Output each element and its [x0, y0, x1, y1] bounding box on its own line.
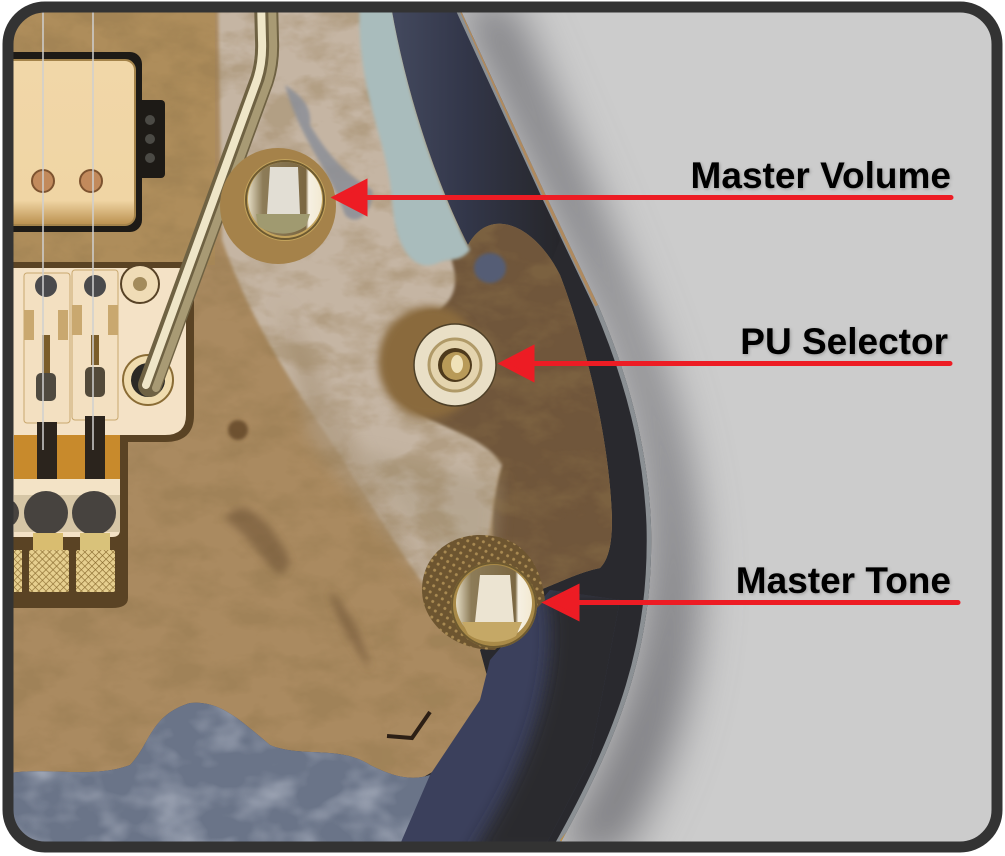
- translucent pale resin field: [218, 0, 502, 640]
- arrow: pu selector: [503, 348, 950, 378]
- tremolo arm: [146, 0, 273, 388]
- pale blue resin streak: [359, 0, 470, 265]
- strings: [43, 0, 93, 450]
- callout: pu selector: [503, 321, 950, 378]
- arrow: master tone: [547, 588, 958, 618]
- knob: master volume: [220, 148, 336, 264]
- guitar edge shadow: [456, 0, 697, 856]
- gold end strip: [560, 832, 566, 842]
- callout: master volume: [336, 155, 951, 212]
- arrow: master volume: [336, 182, 951, 212]
- label: master volume: Master Volume: [691, 155, 951, 196]
- body binding: [456, 0, 651, 856]
- wood grain: [14, 12, 611, 772]
- whammy mount: [123, 355, 173, 405]
- pickup: [0, 52, 165, 232]
- callout: master tone: [547, 560, 958, 618]
- label: master tone: Master Tone: [736, 560, 951, 601]
- gray-blue inclusions: [285, 85, 372, 220]
- lower pearl resin: [14, 590, 619, 842]
- dark wood burl: [424, 224, 612, 588]
- saddles: [24, 273, 70, 423]
- maple wood top: [14, 12, 612, 778]
- dark blue burst band: [392, 12, 524, 244]
- bridge assembly: [0, 262, 194, 608]
- label: pu selector: PU Selector: [740, 321, 948, 362]
- switch: pu selector: [378, 306, 496, 418]
- guitar body: [14, 12, 652, 842]
- knob: master tone: [422, 535, 545, 650]
